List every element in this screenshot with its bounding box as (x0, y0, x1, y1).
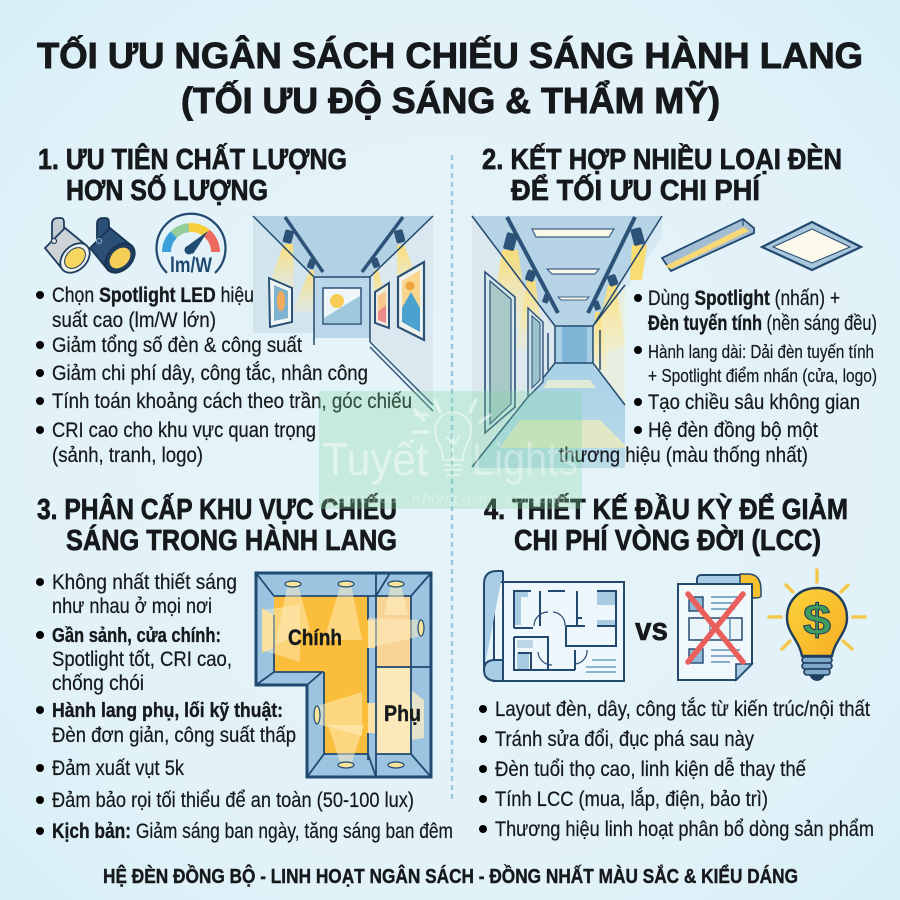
panel: section 2 (472, 142, 877, 468)
bullet list: section 3: Đảm bảo rọi tối thiểu để an toàn (50-100 lux) (52, 789, 414, 812)
bullet list: section 4 (479, 698, 874, 841)
bullet list: section 1: Giảm chi phí dây, công tắc, nhân công (52, 362, 368, 385)
bullet list: section 3: Hành lang phụ, lối kỹ thuật: (52, 699, 283, 722)
bullet list: section 3: Kịch bản: Giảm sáng ban ngày, tăng sáng ban đêm (52, 820, 453, 843)
bullet list: section 1: Tính toán khoảng cách theo trần, góc chiếu (52, 390, 412, 413)
title: (TỐI ƯU ĐỘ SÁNG & THẨM MỸ) (181, 79, 720, 121)
bullet list: section 2: Tạo chiều sâu không gian (648, 391, 860, 414)
chart: lighting zone floor plan: Phụ (384, 701, 421, 726)
bullet list: section 3: chống chói (52, 672, 144, 695)
heading: section 4: 4. THIẾT KẾ ĐẦU KỲ ĐỂ GIẢM (484, 492, 848, 526)
bullet list: section 3: Đảm xuất vụt 5k (52, 757, 184, 780)
bullet list: section 4: Đèn tuổi thọ cao, linh kiện dễ thay thế (495, 758, 806, 781)
heading: section 3: 3. PHÂN CẤP KHU VỰC CHIẾU (37, 492, 397, 526)
heading: section 2 (482, 142, 842, 207)
title (37, 34, 863, 121)
icon: dollar light bulb (769, 570, 865, 681)
bullet list: section 2: thương hiệu (màu thống nhất) (559, 444, 808, 467)
bullet list: section 4: Tránh sửa đổi, đục phá sau này (495, 728, 754, 751)
bullet list: section 1: Giảm tổng số đèn & công suất (52, 334, 302, 357)
central dashed divider (451, 155, 453, 802)
bullet list: section 1: suất cao (lm/W lớn) (52, 309, 216, 332)
bullet list: section 3 (36, 571, 453, 843)
icon: crossed-out document (678, 574, 761, 680)
bullet list: section 1 (36, 284, 412, 467)
bullet list: section 1: CRI cao cho khu vực quan trọng (52, 419, 316, 442)
icon: lm/W efficiency gauge: lm/W (170, 254, 212, 277)
chart: lighting zone floor plan (256, 573, 431, 777)
heading: section 1 (38, 142, 347, 207)
icon: dollar light bulb: $ (803, 596, 831, 645)
icon: gallery corridor illustration (253, 216, 433, 411)
watermark (319, 391, 582, 509)
footer banner: HỆ ĐÈN ĐỒNG BỘ - LINH HOẠT NGÂN SÁCH - ĐỒNG NHẤT MÀU SẮC & KIỂU DÁNG (103, 864, 798, 888)
watermark: Lights (472, 433, 578, 485)
watermark: Đèn chiếu - Không gian - Lối sống (326, 490, 566, 506)
panel: section 1 (36, 142, 433, 467)
chart: lighting zone floor plan: Chính (288, 625, 342, 650)
icon: linear luminaire (662, 219, 754, 271)
bullet list: section 3: Spotlight tốt, CRI cao, (52, 648, 232, 671)
bullet list: section 4: Tính LCC (mua, lắp, điện, bảo trì) (495, 788, 768, 811)
bullet list: section 3: Không nhất thiết sáng (52, 571, 237, 594)
icon: blueprint floor plan (484, 571, 624, 681)
bullet list: section 2: Dùng Spotlight (nhấn) + (648, 287, 840, 310)
bullet list: section 3: như nhau ở mọi nơi (52, 595, 212, 618)
text: vs: vs (635, 611, 668, 647)
heading: section 1: HƠN SỐ LƯỢNG (66, 173, 268, 207)
bullet list: section 3: Gần sảnh, cửa chính: (52, 624, 221, 647)
bullet list: section 2 (559, 287, 877, 467)
bullet list: section 1: (sảnh, tranh, logo) (52, 444, 203, 467)
title: TỐI ƯU NGÂN SÁCH CHIẾU SÁNG HÀNH LANG (37, 34, 863, 76)
panel: section 3 (36, 492, 453, 843)
heading: section 4 (484, 492, 848, 557)
heading: section 4: CHI PHÍ VÒNG ĐỜI (LCC) (514, 523, 821, 557)
heading: section 3 (37, 492, 397, 557)
panel: section 4 (479, 492, 874, 841)
heading: section 1: 1. ƯU TIÊN CHẤT LƯỢNG (38, 142, 347, 176)
icon: lm/W efficiency gauge (156, 214, 226, 277)
heading: section 3: SÁNG TRONG HÀNH LANG (66, 523, 397, 557)
icon: navy spotlight (90, 218, 141, 279)
bullet list: section 3: Đèn đơn giản, công suất thấp (52, 724, 296, 747)
watermark: Tuyết (322, 433, 428, 485)
bullet list: section 1: Chọn Spotlight LED hiệu (52, 284, 254, 307)
heading: section 2: 2. KẾT HỢP NHIỀU LOẠI ĐÈN (482, 142, 842, 176)
icon: square panel light (762, 222, 861, 270)
heading: section 2: ĐỂ TỐI ƯU CHI PHÍ (511, 173, 761, 207)
icon: silver spotlight (45, 218, 96, 279)
icon: corridor illustration (472, 216, 662, 468)
bullet list: section 2: Hệ đèn đồng bộ một (648, 419, 818, 442)
